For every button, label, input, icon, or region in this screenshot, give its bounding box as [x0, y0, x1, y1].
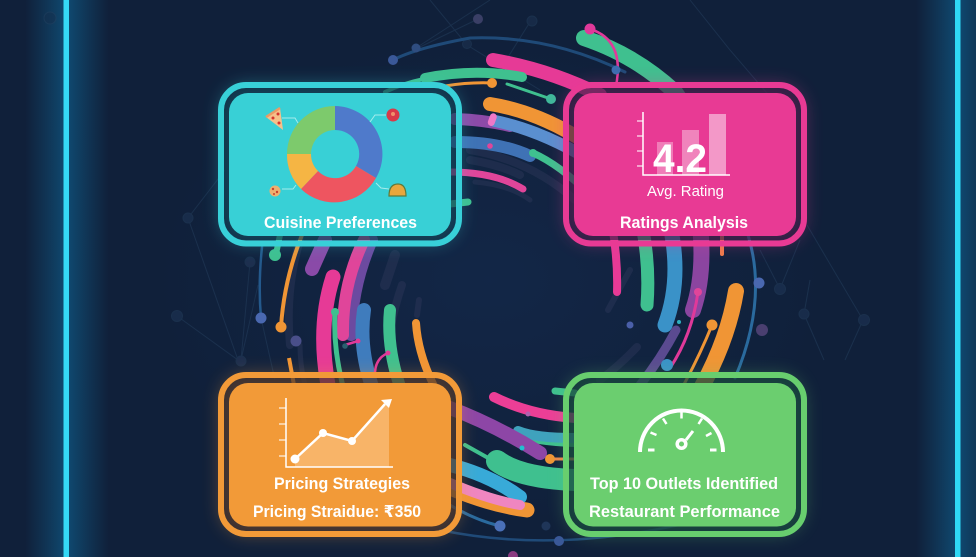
panel: ratings analysis	[566, 85, 804, 244]
heading: Restaurant Performance	[589, 503, 780, 521]
flowing arcs	[260, 29, 756, 540]
bottom arcs	[494, 397, 575, 418]
arc nodes	[256, 14, 768, 557]
pricing value: Pricing Straidue: ₹350	[253, 503, 421, 521]
right arcs	[612, 225, 617, 292]
heading: Cuisine Preferences	[264, 213, 417, 232]
card frame: cuisine	[221, 85, 459, 244]
donut chart	[287, 106, 382, 202]
metric: Top 10 Outlets Identified	[590, 475, 778, 493]
icon: gauge	[640, 410, 723, 452]
right neon line	[916, 0, 976, 557]
heading: Ratings Analysis	[620, 213, 748, 232]
icon: pizza slice	[266, 108, 298, 130]
panel: restaurant performance	[566, 375, 804, 534]
icon: red badge	[370, 108, 400, 122]
line chart	[279, 398, 393, 467]
card frame: performance	[566, 375, 804, 534]
card frame: pricing	[221, 375, 459, 534]
top arcs	[393, 38, 625, 72]
left neon line	[25, 0, 109, 557]
heading: Pricing Strategies	[274, 475, 410, 493]
rating value: 4.2	[653, 137, 707, 181]
rating label: Avg. Rating	[647, 183, 724, 200]
card frame: ratings	[566, 85, 804, 244]
bar chart	[637, 112, 730, 175]
left arcs	[260, 247, 262, 318]
icon: small pizza	[270, 185, 296, 196]
network background	[44, 0, 870, 380]
panel: cuisine preferences	[221, 85, 459, 244]
panel: pricing strategies	[221, 375, 459, 534]
dim arcs	[289, 150, 637, 385]
icon: taco	[376, 183, 406, 196]
